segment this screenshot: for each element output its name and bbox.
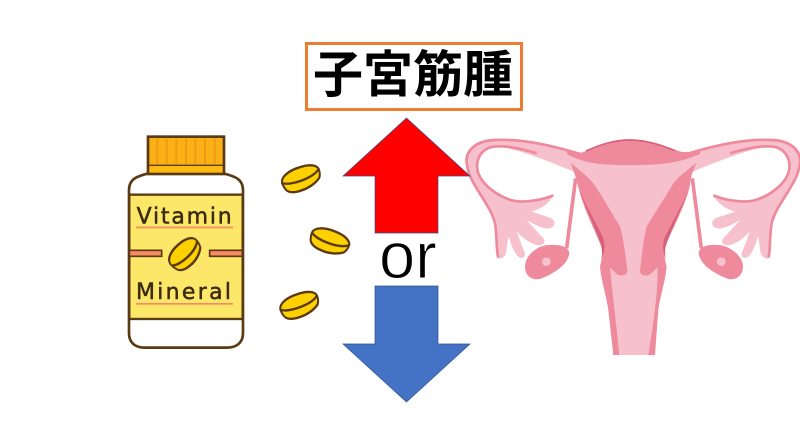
left fallopian tube and fimbriae bbox=[466, 139, 580, 258]
arrow: up (red) bbox=[343, 118, 470, 233]
fundus top highlight bbox=[586, 140, 675, 151]
tablet 1 bbox=[279, 161, 324, 196]
uterine cavity bbox=[560, 151, 708, 355]
dark wall edges bbox=[579, 188, 605, 258]
right ovary and ligament bbox=[692, 178, 743, 279]
bottle body bbox=[129, 173, 243, 348]
bottle label bbox=[129, 195, 243, 319]
tablet 2 bbox=[307, 224, 352, 259]
label underline bbox=[136, 227, 233, 228]
tablet on label bbox=[164, 233, 206, 275]
icon: uterus illustration bbox=[466, 139, 800, 355]
icon: supplement bottle bbox=[129, 137, 352, 348]
text: or: or bbox=[379, 219, 437, 292]
arrow: down (blue) bbox=[343, 286, 470, 402]
label text: Vitamin: Vitamin bbox=[137, 204, 232, 229]
left ovary and ligament bbox=[525, 178, 576, 279]
label stripes bbox=[129, 250, 242, 256]
uterus outer wall bbox=[567, 140, 701, 355]
tablet 3 bbox=[277, 288, 322, 322]
label text: Mineral: Mineral bbox=[136, 280, 231, 305]
label underline bbox=[136, 303, 233, 305]
title text: 子宮筋腫 bbox=[313, 47, 513, 103]
bottle cap bbox=[148, 137, 224, 174]
right fallopian tube and fimbriae bbox=[687, 139, 800, 258]
title box bbox=[306, 44, 522, 110]
